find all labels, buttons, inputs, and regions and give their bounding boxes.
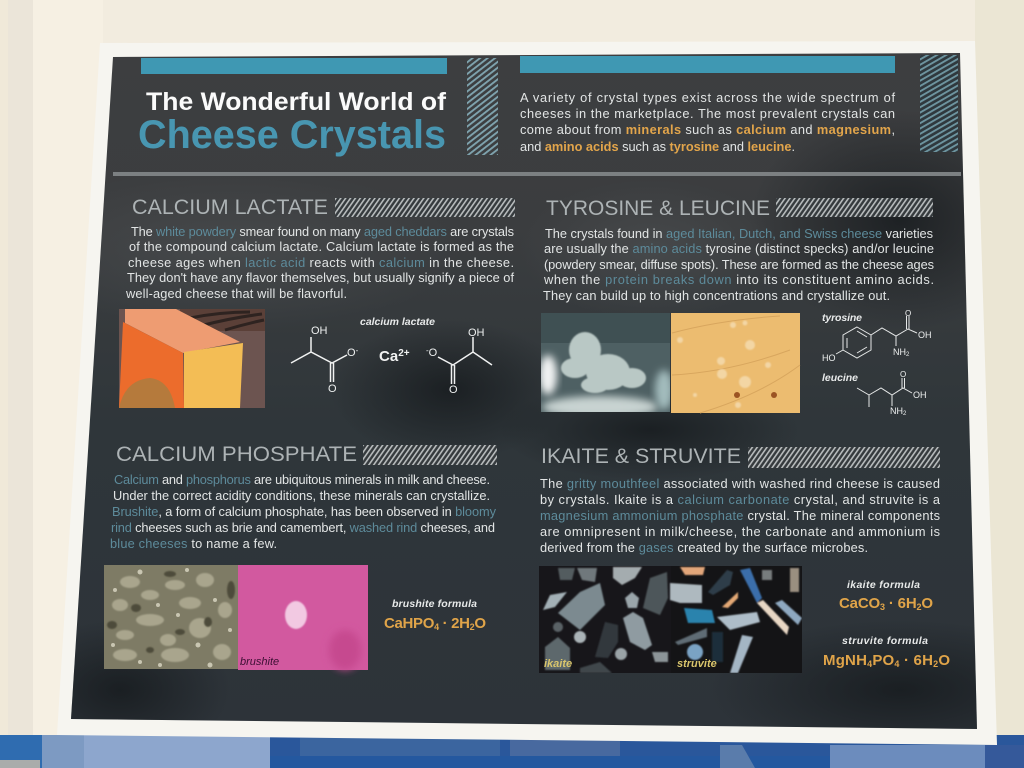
text: calcium phosphate description: blue cheeses to name a few. xyxy=(110,536,277,551)
photo: ikaite crystals xyxy=(539,566,671,673)
text: tyrosine and leucine description: The crystals found in aged Italian, Dutch, and Swiss cheese varieties xyxy=(545,226,933,241)
struvite formula: 2 xyxy=(933,659,938,669)
text: ikaite and struvite description xyxy=(540,476,941,555)
chemical structure: calcium lactate: calcium lactate xyxy=(360,316,435,328)
chemical structure: leucine: leucine xyxy=(822,372,858,384)
brushite formula: O xyxy=(474,615,486,632)
heading: ikaite and struvite xyxy=(541,445,940,468)
intro text: come about from minerals such as calcium and magnesium, xyxy=(520,122,895,137)
intro text: and amino acids such as tyrosine and leucine. xyxy=(520,139,795,154)
text: tyrosine and leucine description xyxy=(543,226,934,303)
text: tyrosine and leucine description: (powdery smear, diffuse spots). These are formed as the cheese ages xyxy=(544,257,934,272)
brushite formula: · 2H xyxy=(439,615,470,632)
photo: aged cheddar xyxy=(119,309,265,408)
struvite formula: 4 xyxy=(867,659,872,669)
panel: calcium lactate xyxy=(119,196,515,408)
photo: aged cheese with crystals xyxy=(671,313,800,413)
chemical structure: tyrosine xyxy=(822,309,932,363)
brushite formula: 2 xyxy=(470,622,475,632)
text: ikaite and struvite description: The gritty mouthfeel associated with washed rind cheese is caused xyxy=(540,476,940,491)
heading: calcium lactate xyxy=(132,196,515,219)
chemical structure: calcium lactate: 2+ xyxy=(398,348,410,359)
header divider xyxy=(113,172,961,176)
heading: tyrosine and leucine: TYROSINE & LEUCINE xyxy=(546,197,770,220)
chemical structure: calcium lactate: O xyxy=(328,383,337,395)
text: calcium lactate description: cheese ages when lactic acid reacts with calcium in the cheese. xyxy=(128,255,514,270)
text: calcium phosphate description: Brushite, a form of calcium phosphate, has been observed in bloomy xyxy=(112,504,497,519)
chemical structure: tyrosine: O xyxy=(905,309,911,318)
panel: ikaite and struvite xyxy=(539,445,950,673)
text: ikaite and struvite description: are omnipresent in milk/cheese, the carbonate and ammonium is xyxy=(540,524,940,539)
ikaite formula: · 6H xyxy=(885,595,917,612)
ikaite formula xyxy=(839,579,933,612)
chemical structure: calcium lactate: Ca xyxy=(379,348,398,365)
intro text: cheeses in the marketplace. The most prevalent crystals can xyxy=(520,106,895,121)
chemical structure: tyrosine: tyrosine xyxy=(822,312,862,324)
intro hatch block xyxy=(920,55,958,152)
title: The Wonderful World of xyxy=(146,88,447,116)
text: calcium phosphate description: Calcium and phosphorus are ubiquitous minerals in milk and cheese. xyxy=(114,472,490,487)
chemical structure: calcium lactate xyxy=(291,316,492,396)
brushite formula: brushite formula xyxy=(392,598,477,610)
heading: calcium phosphate xyxy=(116,443,497,466)
heading: tyrosine and leucine xyxy=(546,197,933,220)
chemical structure: tyrosine: OH xyxy=(918,330,932,340)
heading: calcium phosphate: CALCIUM PHOSPHATE xyxy=(116,443,357,466)
brushite formula: CaHPO xyxy=(384,615,434,632)
chemical structure: leucine xyxy=(822,370,926,417)
chemical structure: leucine: OH xyxy=(913,390,926,400)
text: calcium phosphate description: Under the correct acidity conditions, these minerals can crystallize. xyxy=(113,488,490,503)
title hatch block xyxy=(467,58,498,155)
ikaite formula: O xyxy=(921,595,933,612)
struvite formula: O xyxy=(938,652,950,669)
chemical structure: calcium lactate: - xyxy=(356,346,359,355)
chemical structure: calcium lactate: OH xyxy=(468,327,485,339)
photo: brushite crystal: brushite xyxy=(240,656,279,668)
title xyxy=(138,88,447,157)
chemical structure: tyrosine: NH xyxy=(893,347,906,357)
chemical structure: leucine: NH xyxy=(890,406,903,416)
intro text xyxy=(520,90,895,154)
photo: bloomy rind cheese xyxy=(104,565,238,669)
chemical structure: calcium lactate: O xyxy=(449,384,458,396)
heading: ikaite and struvite: IKAITE & STRUVITE xyxy=(541,445,741,468)
chemical structure: leucine: 2 xyxy=(903,411,907,417)
struvite formula: · 6H xyxy=(900,652,933,669)
intro text: A variety of crystal types exist across the wide spectrum of xyxy=(520,90,895,105)
photo: crystal micrograph xyxy=(539,313,673,418)
text: calcium lactate description: The white powdery smear found on many aged cheddars are crystals xyxy=(131,224,514,239)
text: calcium lactate description: They don't have any flavor themselves, but usually signify a piece of xyxy=(127,270,514,285)
text: calcium lactate description xyxy=(125,224,514,301)
photo labels: struvite xyxy=(677,658,717,670)
text: ikaite and struvite description: derived from the gases created by the surface microbes. xyxy=(540,540,868,555)
text: calcium phosphate description: rind cheeses such as brie and camembert, washed rind cheeses, and xyxy=(111,520,495,535)
photo: brushite crystal xyxy=(238,565,368,670)
chemical structure: calcium lactate: OH xyxy=(311,325,328,337)
brushite formula: 4 xyxy=(434,622,439,632)
text: ikaite and struvite description: by crystals. Ikaite is a calcium carbonate crystal, and struvite is a xyxy=(540,492,941,507)
struvite formula: struvite formula xyxy=(842,635,928,647)
ikaite formula: CaCO xyxy=(839,595,880,612)
title: Cheese Crystals xyxy=(138,113,446,157)
chemical structure: leucine: O xyxy=(900,370,906,379)
struvite formula: MgNH xyxy=(823,652,867,669)
text: calcium lactate description: of the compound calcium lactate. Calcium lactate is formed as the xyxy=(129,239,514,254)
chemical structure: calcium lactate: - xyxy=(426,346,429,355)
struvite formula xyxy=(823,635,950,669)
text: tyrosine and leucine description: They can build up to high concentrations and crystallize out. xyxy=(543,288,890,303)
photo labels xyxy=(544,658,717,670)
chemical structure: calcium lactate: O xyxy=(347,347,356,359)
text: calcium lactate description: well-aged cheese that will be flavorful. xyxy=(125,286,347,301)
text: tyrosine and leucine description: are usually the amino acids tyrosine (distinct specks) and/or leucine xyxy=(544,241,934,256)
ikaite formula: ikaite formula xyxy=(847,579,920,591)
photo: struvite crystals xyxy=(670,566,802,673)
brushite formula xyxy=(384,598,486,632)
chemical structure: calcium lactate: O xyxy=(429,347,438,359)
panel: tyrosine and leucine xyxy=(539,197,934,418)
ikaite formula: 2 xyxy=(916,602,922,612)
chemical structure: tyrosine: 2 xyxy=(906,352,910,358)
title accent bar xyxy=(141,58,447,74)
panel: calcium phosphate xyxy=(104,443,497,670)
chemical structure: tyrosine: HO xyxy=(822,353,836,363)
struvite formula: PO xyxy=(872,652,895,669)
text: tyrosine and leucine description: when the protein breaks down into its constituent amino acids. xyxy=(543,272,934,287)
blue surface at bottom xyxy=(0,735,1024,768)
text: calcium phosphate description xyxy=(110,472,497,551)
text: ikaite and struvite description: magnesium ammonium phosphate crystal. The mineral components xyxy=(540,508,940,523)
struvite formula: 4 xyxy=(894,659,899,669)
photo labels: ikaite xyxy=(544,658,572,670)
heading: calcium lactate: CALCIUM LACTATE xyxy=(132,196,328,219)
ikaite formula: 3 xyxy=(880,602,885,612)
intro accent bar xyxy=(520,56,895,73)
dark poster panel xyxy=(71,53,977,729)
